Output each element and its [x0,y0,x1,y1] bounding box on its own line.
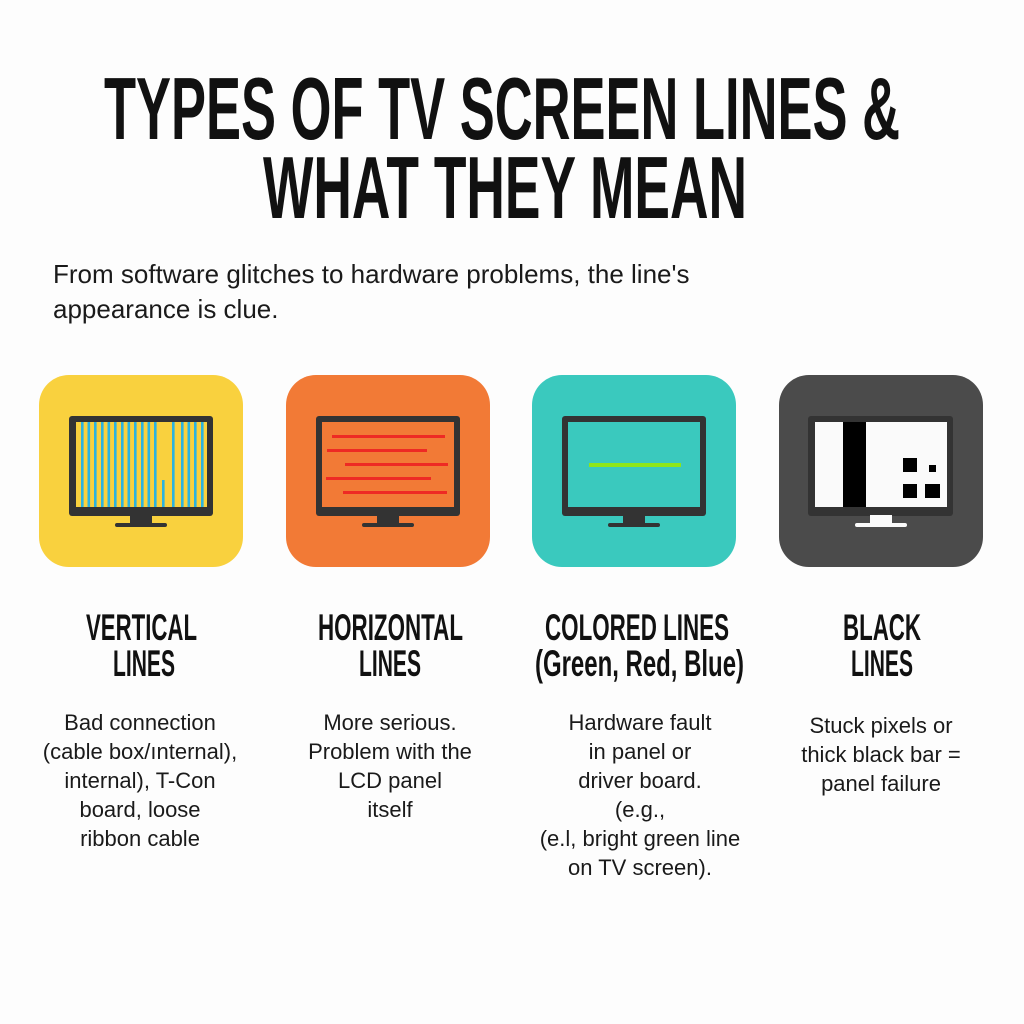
text: colored lines description: on TV screen). [568,855,712,880]
heading: horizontal lines: HORIZONTAL [318,607,463,648]
text: black lines description: panel failure [821,771,941,796]
text: black lines description [801,713,961,796]
subtitle: appearance is clue. [53,294,278,324]
text: horizontal lines description: LCD panel [338,768,442,793]
text: colored lines description: (e.l, bright green line [540,826,740,851]
heading: vertical lines [86,607,197,684]
panel: black lines icon [779,375,983,567]
heading: black lines: BLACK [843,607,921,648]
heading: colored lines [535,607,744,684]
panel: horizontal lines icon [286,375,490,567]
text: vertical lines description: ribbon cable [80,826,200,851]
text: colored lines description: (e.g., [615,797,665,822]
text: vertical lines description [43,710,237,851]
text: horizontal lines description: More serious. [323,710,457,735]
text: black lines description: thick black bar = [801,742,961,767]
text: vertical lines description: board, loose [79,797,201,822]
text: horizontal lines description: itself [367,797,413,822]
text: colored lines description: in panel or [589,739,691,764]
text: colored lines description [540,710,740,880]
heading: vertical lines: LINES [113,643,175,684]
text: vertical lines description: Bad connection [64,710,216,735]
text: horizontal lines description [308,710,472,822]
text: vertical lines description: internal), T-Con [64,768,216,793]
heading: colored lines: COLORED LINES [545,607,729,648]
text: vertical lines description: (cable box/ınternal), [43,739,237,764]
text: colored lines description: Hardware fault [568,710,712,735]
title [104,59,900,237]
text: horizontal lines description: Problem with the [308,739,472,764]
subtitle [53,259,689,324]
heading: horizontal lines [318,607,463,684]
heading: black lines: LINES [851,643,913,684]
heading: colored lines: (Green, Red, Blue) [535,643,744,684]
text: colored lines description: driver board. [578,768,702,793]
panel: vertical lines icon [39,375,243,567]
subtitle: From software glitches to hardware problems, the line's [53,259,689,289]
text: black lines description: Stuck pixels or [809,713,953,738]
heading: vertical lines: VERTICAL [86,607,197,648]
heading: horizontal lines: LINES [359,643,421,684]
heading: black lines [843,607,921,684]
panel: colored lines icon [532,375,736,567]
